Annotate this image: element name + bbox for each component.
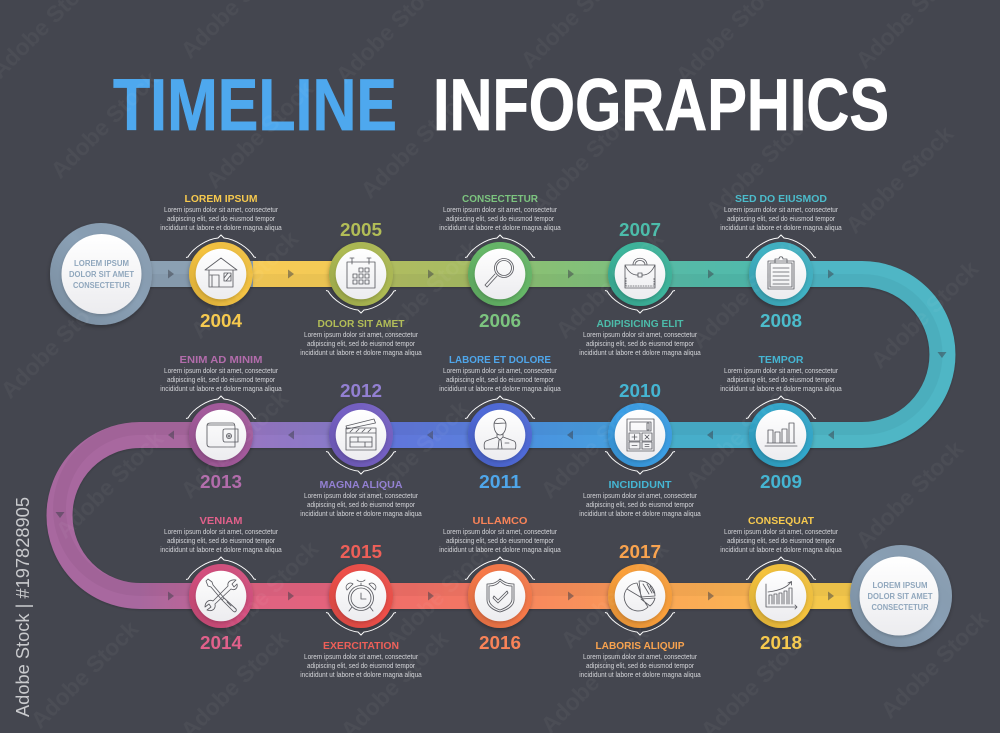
icon: bar chart xyxy=(765,423,797,446)
milestone 2016 xyxy=(439,515,561,653)
title: INFOGRAPHICS xyxy=(433,65,889,146)
watermarks: Adobe Stock xyxy=(865,255,983,373)
milestone 2015: EXERCITATION xyxy=(323,640,399,652)
milestone 2010 xyxy=(579,380,701,518)
milestone 2018 xyxy=(720,515,842,653)
milestone 2005 xyxy=(300,219,422,357)
milestone 2013: 2013 xyxy=(200,471,242,492)
milestone 2016: adipiscing elit, sed do eiusmod tempor xyxy=(446,538,555,545)
end circle xyxy=(850,545,952,647)
icon: calculator xyxy=(627,419,654,451)
icon: pie chart xyxy=(624,581,655,611)
milestone 2007: Lorem ipsum dolor sit amet, consectetur xyxy=(583,332,698,339)
milestone 2016: Lorem ipsum dolor sit amet, consectetur xyxy=(443,529,558,536)
milestone 2004: adipiscing elit, sed do eiusmod tempor xyxy=(167,216,276,223)
watermarks: Adobe Stock xyxy=(355,395,473,513)
milestone 2005: 2005 xyxy=(340,219,382,240)
milestone 2007: 2007 xyxy=(619,219,661,240)
milestone 2008: incididunt ut labore et dolore magna aliqua xyxy=(720,225,842,232)
icon: calendar xyxy=(347,258,375,288)
icon: clipboard xyxy=(768,257,794,289)
milestone 2010: adipiscing elit, sed do eiusmod tempor xyxy=(586,502,695,509)
milestone 2005: DOLOR SIT AMET xyxy=(318,318,405,330)
milestone 2008: SED DO EIUSMOD xyxy=(735,193,827,205)
milestone 2018: CONSEQUAT xyxy=(748,515,815,527)
milestone 2006: CONSECTETUR xyxy=(462,193,538,205)
watermarks: Adobe Stock xyxy=(25,615,143,733)
milestone 2018: adipiscing elit, sed do eiusmod tempor xyxy=(727,538,836,545)
milestone 2011: 2011 xyxy=(479,471,521,492)
watermarks: Adobe Stock xyxy=(205,535,323,653)
milestone 2012: adipiscing elit, sed do eiusmod tempor xyxy=(307,502,416,509)
milestone 2017: 2017 xyxy=(619,541,661,562)
icon: tools xyxy=(205,579,237,612)
milestone 2009: Lorem ipsum dolor sit amet, consectetur xyxy=(724,368,839,375)
milestone 2007: adipiscing elit, sed do eiusmod tempor xyxy=(586,341,695,348)
watermarks: Adobe Stock xyxy=(175,385,293,503)
milestone 2013: adipiscing elit, sed do eiusmod tempor xyxy=(167,377,276,384)
icon: person xyxy=(484,418,516,449)
milestone 2010: INCIDIDUNT xyxy=(608,479,672,491)
start circle: CONSECTETUR xyxy=(73,280,131,290)
milestone 2005: incididunt ut labore et dolore magna aliqua xyxy=(300,350,422,357)
milestone 2005: Lorem ipsum dolor sit amet, consectetur xyxy=(304,332,419,339)
watermarks: Adobe Stock xyxy=(850,435,968,553)
icon: briefcase xyxy=(625,258,655,288)
title xyxy=(113,65,889,146)
milestone 2016: ULLAMCO xyxy=(472,515,528,527)
end circle: DOLOR SIT AMET xyxy=(868,591,933,601)
watermarks: Adobe Stock xyxy=(680,375,798,493)
milestone 2011: Lorem ipsum dolor sit amet, consectetur xyxy=(443,368,558,375)
icon: shield xyxy=(487,579,514,612)
milestone 2014: VENIAM xyxy=(200,515,243,527)
milestone 2018: 2018 xyxy=(760,632,802,653)
stock id caption: Adobe Stock | #197828905 xyxy=(13,497,33,717)
milestone 2012: 2012 xyxy=(340,380,382,401)
milestone 2015: incididunt ut labore et dolore magna aliqua xyxy=(300,672,422,679)
milestone 2007: incididunt ut labore et dolore magna aliqua xyxy=(579,350,701,357)
watermarks: Adobe Stock xyxy=(355,85,473,203)
end circle: CONSECTETUR xyxy=(872,602,929,612)
milestone 2014 xyxy=(160,515,282,653)
milestone 2004: Lorem ipsum dolor sit amet, consectetur xyxy=(164,207,279,214)
milestone 2009: incididunt ut labore et dolore magna aliqua xyxy=(720,386,842,393)
milestone 2009 xyxy=(720,354,842,492)
milestone 2015: 2015 xyxy=(340,541,382,562)
watermarks: Adobe Stock xyxy=(535,385,653,503)
icon: clapperboard xyxy=(346,419,376,450)
start circle xyxy=(50,223,152,325)
milestone 2012: incididunt ut labore et dolore magna aliqua xyxy=(300,511,422,518)
milestone 2014: Lorem ipsum dolor sit amet, consectetur xyxy=(164,529,279,536)
milestone 2015: Lorem ipsum dolor sit amet, consectetur xyxy=(304,654,419,661)
milestone 2007 xyxy=(579,219,701,357)
milestone 2008: adipiscing elit, sed do eiusmod tempor xyxy=(727,216,836,223)
milestone 2013: Lorem ipsum dolor sit amet, consectetur xyxy=(164,368,279,375)
start circle: DOLOR SIT AMET xyxy=(69,269,135,279)
end circle: LOREM IPSUM xyxy=(872,580,928,590)
milestone 2017: adipiscing elit, sed do eiusmod tempor xyxy=(586,663,695,670)
milestone 2006 xyxy=(439,193,561,331)
watermarks: Adobe Stock xyxy=(380,535,498,653)
milestone 2009: 2009 xyxy=(760,471,802,492)
milestone 2007: ADIPISICING ELIT xyxy=(596,318,684,330)
milestone 2011: incididunt ut labore et dolore magna aliqua xyxy=(439,386,561,393)
milestone 2004 xyxy=(160,193,282,331)
milestone 2014: 2014 xyxy=(200,632,243,653)
milestone 2016: 2016 xyxy=(479,632,521,653)
milestone 2013: ENIM AD MINIM xyxy=(180,354,263,366)
milestone 2008: 2008 xyxy=(760,310,802,331)
watermarks: Adobe Stock xyxy=(185,225,303,343)
milestone 2006: Lorem ipsum dolor sit amet, consectetur xyxy=(443,207,558,214)
milestone 2010: incididunt ut labore et dolore magna aliqua xyxy=(579,511,701,518)
milestone 2006: incididunt ut labore et dolore magna aliqua xyxy=(439,225,561,232)
icon: house xyxy=(205,258,237,287)
milestone 2005: adipiscing elit, sed do eiusmod tempor xyxy=(307,341,416,348)
milestone 2018: incididunt ut labore et dolore magna aliqua xyxy=(720,547,842,554)
milestone 2012: MAGNA ALIQUA xyxy=(320,479,403,491)
timeline track xyxy=(60,261,942,609)
watermarks: Adobe Stock xyxy=(50,425,168,543)
milestone 2004: incididunt ut labore et dolore magna aliqua xyxy=(160,225,282,232)
milestone 2014: adipiscing elit, sed do eiusmod tempor xyxy=(167,538,276,545)
icon: magnifier xyxy=(485,258,514,287)
milestone 2004: LOREM IPSUM xyxy=(184,193,258,205)
watermarks: Adobe Stock xyxy=(875,605,993,723)
milestone 2004: 2004 xyxy=(200,310,243,331)
milestone 2015: adipiscing elit, sed do eiusmod tempor xyxy=(307,663,416,670)
milestone 2017: LABORIS ALIQUIP xyxy=(596,640,684,652)
milestone 2013: incididunt ut labore et dolore magna aliqua xyxy=(160,386,282,393)
icon: wallet xyxy=(207,423,238,447)
milestone 2017 xyxy=(579,541,701,679)
milestone 2009: TEMPOR xyxy=(758,354,804,366)
milestone 2009: adipiscing elit, sed do eiusmod tempor xyxy=(727,377,836,384)
watermarks: Adobe Stock xyxy=(45,65,163,183)
milestone 2008: Lorem ipsum dolor sit amet, consectetur xyxy=(724,207,839,214)
watermarks: Adobe Stock xyxy=(525,100,643,218)
watermarks: Adobe Stock xyxy=(555,535,673,653)
milestone 2010: 2010 xyxy=(619,380,661,401)
watermarks: Adobe Stock xyxy=(700,105,818,223)
watermarks: Adobe Stock xyxy=(550,225,668,343)
milestone 2016: incididunt ut labore et dolore magna aliqua xyxy=(439,547,561,554)
milestone 2006: adipiscing elit, sed do eiusmod tempor xyxy=(446,216,555,223)
start circle: LOREM IPSUM xyxy=(74,258,129,268)
icon: alarm clock xyxy=(346,580,376,611)
milestone 2015 xyxy=(300,541,422,679)
milestone 2011: adipiscing elit, sed do eiusmod tempor xyxy=(446,377,555,384)
milestone 2010: Lorem ipsum dolor sit amet, consectetur xyxy=(583,493,698,500)
watermarks: Adobe Stock xyxy=(685,235,803,353)
milestone 2008 xyxy=(720,193,842,331)
milestone 2011 xyxy=(439,354,561,492)
watermarks: Adobe Stock xyxy=(365,235,483,353)
milestone 2018: Lorem ipsum dolor sit amet, consectetur xyxy=(724,529,839,536)
milestone 2012: Lorem ipsum dolor sit amet, consectetur xyxy=(304,493,419,500)
milestone 2014: incididunt ut labore et dolore magna aliqua xyxy=(160,547,282,554)
milestone 2013 xyxy=(160,354,282,492)
milestone 2012 xyxy=(300,380,422,518)
milestone 2011: LABORE ET DOLORE xyxy=(449,354,551,366)
watermarks: Adobe Stock xyxy=(840,120,958,238)
track arrows xyxy=(56,270,946,600)
title: TIMELINE xyxy=(113,65,397,146)
milestone 2017: Lorem ipsum dolor sit amet, consectetur xyxy=(583,654,698,661)
icon: growth chart xyxy=(766,582,797,609)
watermarks: Adobe Stock xyxy=(200,75,318,193)
milestone 2006: 2006 xyxy=(479,310,521,331)
milestone 2017: incididunt ut labore et dolore magna aliqua xyxy=(579,672,701,679)
